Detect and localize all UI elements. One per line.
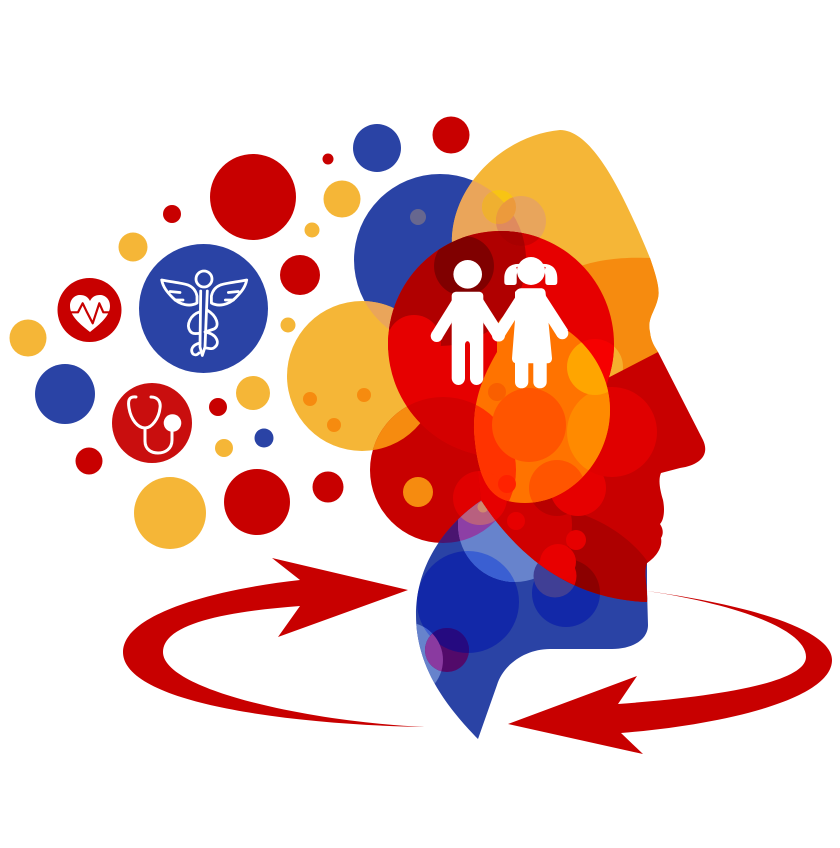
decorative bubbles: [10, 116, 470, 549]
icon: caduceus: [139, 244, 268, 373]
large red circle behind the children: [388, 231, 614, 454]
head: neck in blue: [416, 500, 648, 739]
lower-left red circle: [370, 406, 481, 543]
boy: [431, 260, 505, 385]
orange egg shape: [474, 316, 610, 503]
head: red face: [481, 352, 706, 602]
head: yellow crown: [452, 130, 659, 352]
girl: [492, 257, 568, 388]
arrow: left swoosh: [123, 558, 425, 727]
infographic canvas: [10, 116, 832, 754]
icon: stethoscope: [112, 383, 192, 463]
arrow: right swoosh: [508, 591, 832, 754]
big blue circle: [354, 174, 526, 346]
big yellow circle: [287, 301, 407, 451]
head: orange temple band: [582, 258, 659, 378]
icon: boy and girl holding hands: [431, 257, 568, 388]
icon: heart with pulse: [58, 278, 122, 342]
